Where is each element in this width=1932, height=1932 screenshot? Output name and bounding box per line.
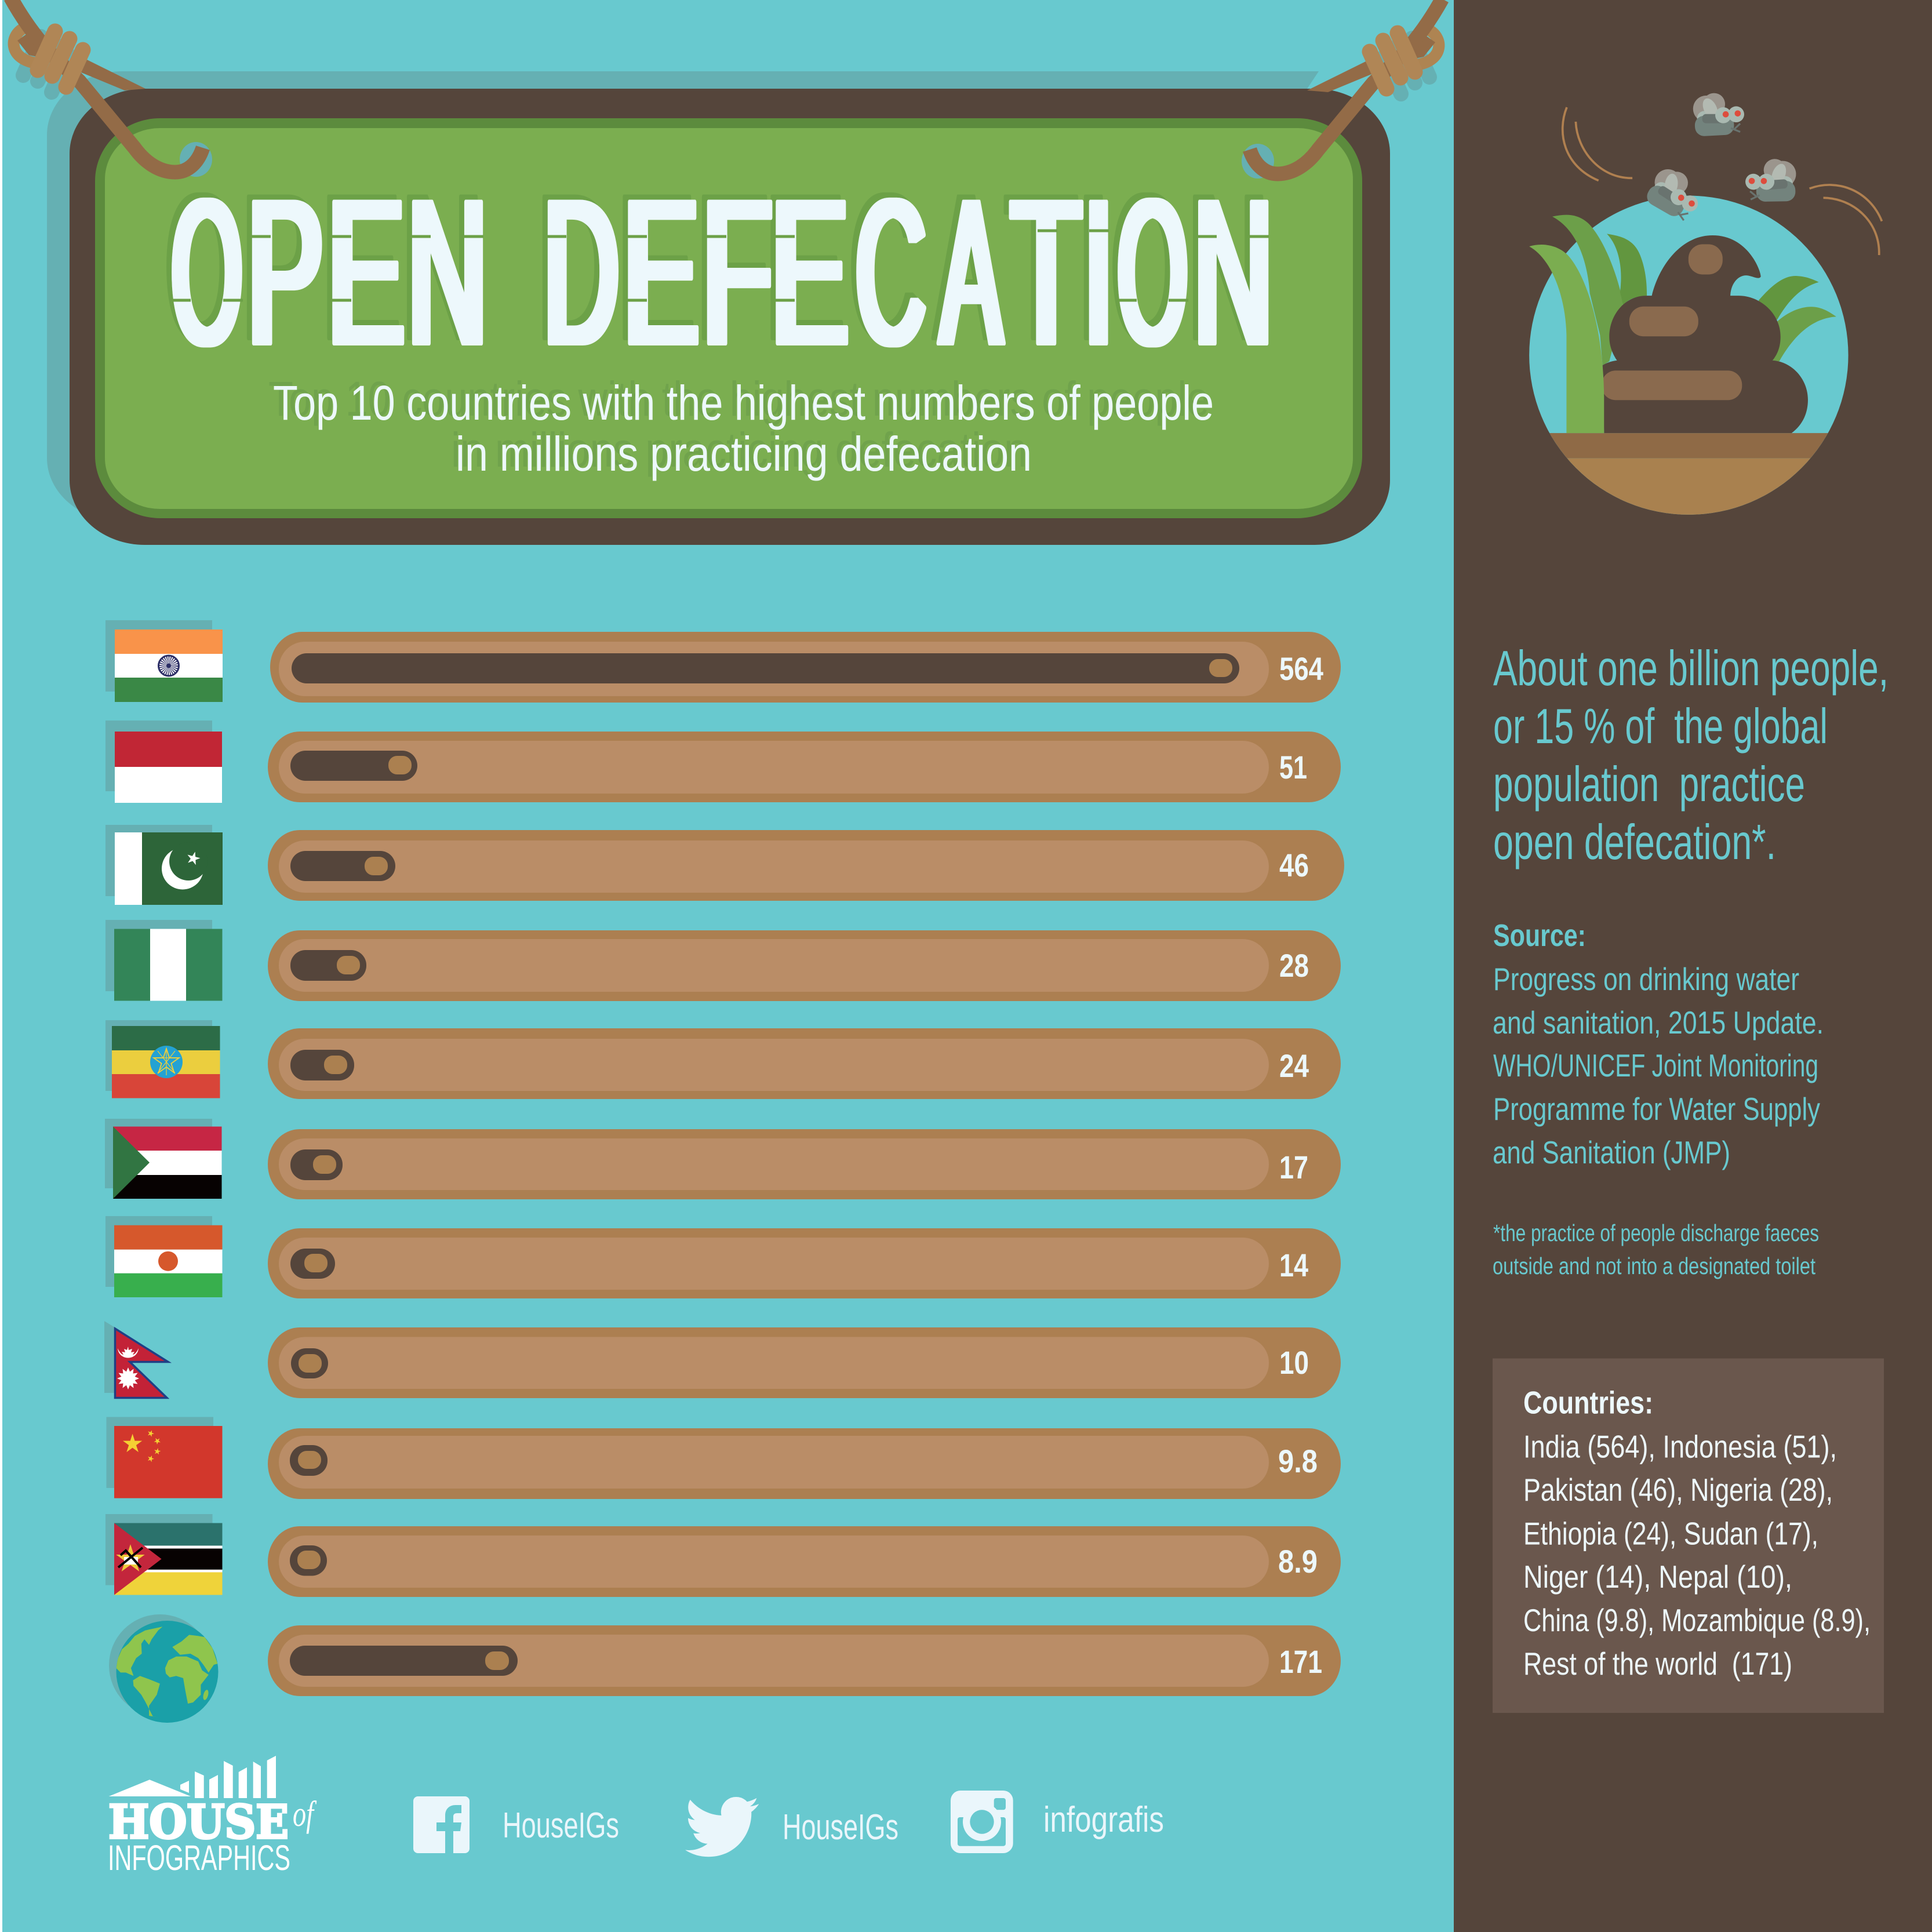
title: F xyxy=(703,158,772,387)
row: Pakistan xyxy=(105,825,1344,905)
title: P xyxy=(248,158,323,387)
motion arcs xyxy=(1563,107,1882,255)
title: E xyxy=(771,158,849,387)
text block: source: WHO/UNICEF Joint Monitoring xyxy=(1493,1047,1818,1083)
text block: source: and sanitation, 2015 Update. xyxy=(1493,1005,1824,1040)
subtitle xyxy=(273,376,1214,481)
row: Rest of the world xyxy=(109,1614,1341,1723)
icon: instagram xyxy=(951,1791,1013,1853)
flag: China xyxy=(107,1417,223,1498)
poop xyxy=(1603,235,1808,433)
hook hole right xyxy=(1242,144,1274,179)
title: E xyxy=(328,158,405,387)
text block: footnote: *the practice of people discharge faeces xyxy=(1493,1220,1819,1246)
row: Mozambique xyxy=(105,1514,1341,1597)
flag: Niger xyxy=(105,1216,223,1297)
row: Niger xyxy=(105,1216,1341,1298)
text block: source xyxy=(1493,918,1824,1170)
panel: countries: Rest of the world (171) xyxy=(1523,1646,1792,1682)
title: T xyxy=(1011,158,1082,387)
row: Pakistan: 46 xyxy=(1279,847,1309,883)
row: Rest of the world: 171 xyxy=(1279,1643,1322,1680)
bar chart xyxy=(104,620,1344,1723)
panel: countries: Ethiopia (24), Sudan (17), xyxy=(1523,1516,1818,1552)
row: Mozambique: 8.9 xyxy=(1278,1543,1318,1580)
title: C xyxy=(856,158,925,387)
fly right xyxy=(1744,158,1798,205)
icon: globe xyxy=(109,1614,218,1723)
icon: twitter xyxy=(685,1797,759,1857)
row: Indonesia: 51 xyxy=(1279,749,1307,785)
panel: right sidebar xyxy=(1454,0,1932,1932)
title xyxy=(172,158,1273,387)
text block: source: Programme for Water Supply xyxy=(1493,1091,1820,1127)
instagram handle: infografis xyxy=(1043,1800,1164,1840)
text block: key fact xyxy=(1493,641,1889,870)
text block: key fact: population practice xyxy=(1493,757,1805,812)
icon: poop illustration with flies xyxy=(1511,93,1882,520)
row: Nigeria xyxy=(105,920,1341,1001)
logo house and bars xyxy=(109,1756,276,1798)
row: China: 9.8 xyxy=(1278,1443,1318,1479)
title: E xyxy=(624,158,698,387)
facebook handle: HouseIGs xyxy=(503,1806,619,1846)
flag: Indonesia xyxy=(105,721,222,803)
row: Ethiopia: 24 xyxy=(1279,1047,1309,1084)
rope right xyxy=(1250,0,1442,174)
row: Indonesia xyxy=(105,721,1341,803)
sign board xyxy=(105,128,1353,509)
twitter handle: HouseIGs xyxy=(783,1807,898,1847)
flag: Pakistan xyxy=(105,825,223,905)
text block: footnote xyxy=(1493,1220,1819,1279)
grass blades xyxy=(1552,215,1836,365)
title: O xyxy=(172,158,242,387)
row: Sudan xyxy=(105,1119,1341,1199)
row: Niger: 14 xyxy=(1279,1247,1308,1283)
text block: source: Source: xyxy=(1493,918,1586,953)
flag: Nigeria xyxy=(105,920,223,1000)
title: O xyxy=(1118,158,1187,387)
row: India xyxy=(105,620,1341,703)
logo: House of Infographics: INFOGRAPHICS xyxy=(108,1838,290,1878)
logo: House of Infographics: of xyxy=(293,1795,317,1834)
panel: countries: Countries: xyxy=(1523,1385,1653,1421)
panel: title sign xyxy=(47,71,1390,545)
fly left xyxy=(1642,162,1708,227)
panel: countries: India (564), Indonesia (51), xyxy=(1523,1428,1837,1464)
row: China xyxy=(107,1417,1341,1499)
flag: Sudan xyxy=(105,1119,221,1199)
row: India: 564 xyxy=(1279,650,1323,687)
panel: countries: Niger (14), Nepal (10), xyxy=(1523,1559,1792,1595)
poop highlights xyxy=(1602,244,1742,400)
text block: footnote: outside and not into a designated toilet xyxy=(1493,1253,1815,1279)
front grass blade xyxy=(1529,245,1604,433)
flag: Mozambique xyxy=(105,1514,223,1595)
row: Nigeria: 28 xyxy=(1279,947,1309,984)
illustration circle xyxy=(1529,195,1849,515)
title: N xyxy=(1194,158,1273,387)
row: Nepal: 10 xyxy=(1279,1344,1309,1381)
fly top xyxy=(1693,93,1744,137)
title: N xyxy=(408,158,487,387)
subtitle: Top 10 countries with the highest numbers of people xyxy=(273,376,1214,430)
sign shadow xyxy=(47,71,1319,522)
hook hole left xyxy=(180,142,212,177)
icon: facebook xyxy=(413,1796,470,1853)
panel: countries: Pakistan (46), Nigeria (28), xyxy=(1523,1472,1833,1508)
logo: House of Infographics: HOUSE xyxy=(108,1795,289,1849)
flag: Ethiopia xyxy=(105,1020,220,1098)
sign board edge xyxy=(95,118,1362,518)
row: Nepal xyxy=(104,1321,1341,1398)
row: Ethiopia xyxy=(105,1020,1341,1099)
title: A xyxy=(941,158,1002,387)
text block: source: and Sanitation (JMP) xyxy=(1493,1134,1730,1170)
rope left xyxy=(10,0,203,172)
subtitle: in millions practicing defecation xyxy=(456,427,1032,481)
sign frame xyxy=(70,89,1390,545)
panel: countries xyxy=(1493,1359,1884,1713)
title: D xyxy=(544,158,619,387)
logo: House of Infographics xyxy=(108,1756,317,1878)
title: I xyxy=(1084,158,1113,387)
text block: key fact: open defecation*. xyxy=(1493,815,1776,870)
text block: source: Progress on drinking water xyxy=(1493,961,1799,997)
flag: India xyxy=(105,620,223,702)
ground xyxy=(1549,433,1828,515)
row: Sudan: 17 xyxy=(1279,1149,1308,1185)
flag: Nepal xyxy=(104,1321,168,1398)
